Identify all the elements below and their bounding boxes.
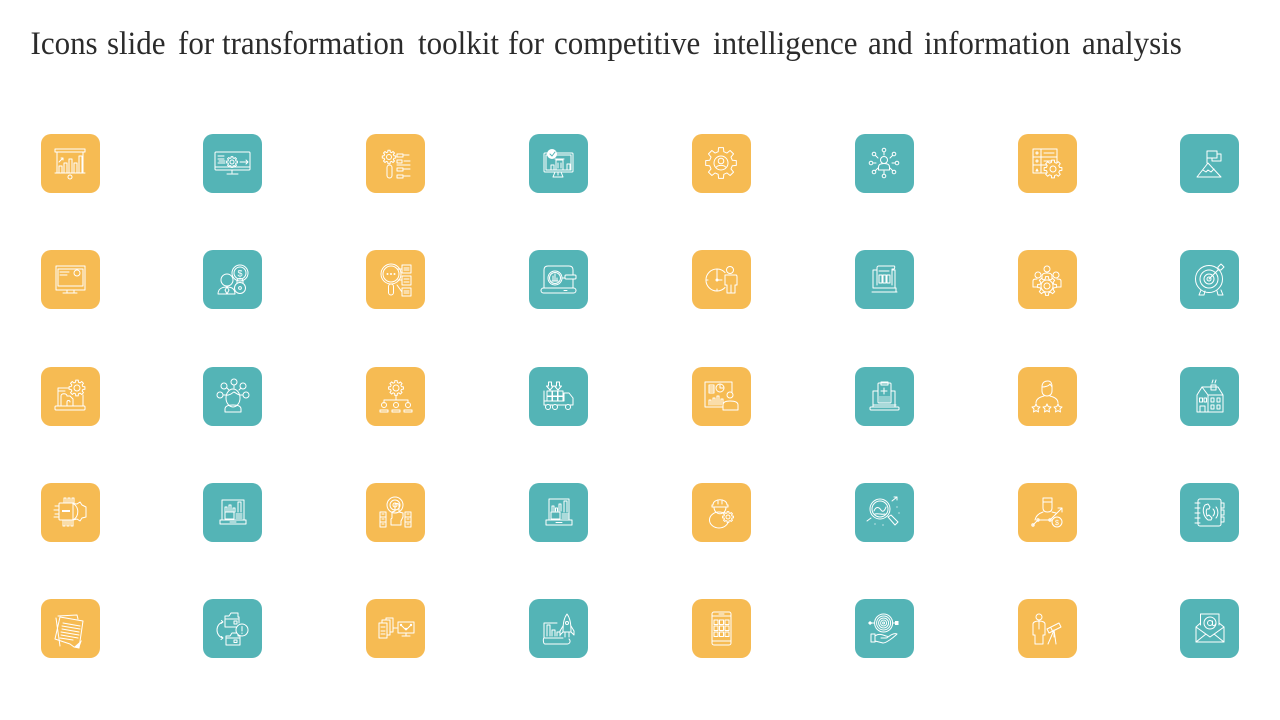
title: information	[924, 24, 1070, 61]
icon: magnifier trends	[867, 497, 900, 526]
icon: presenter dashboard	[705, 382, 738, 410]
tile: laptop statistics	[529, 483, 588, 542]
icon: table settings	[1033, 149, 1062, 178]
icon: documents	[55, 615, 83, 648]
tile: head with ideas	[203, 367, 262, 426]
tile: paper stack	[41, 599, 100, 658]
tile: laptop rocket	[529, 599, 588, 658]
tile: target in hand	[855, 599, 914, 658]
icon: files to monitor	[379, 618, 414, 638]
tile: mobile phone	[692, 599, 751, 658]
tile: folder exchange	[203, 599, 262, 658]
icon: person with three stars	[1032, 381, 1062, 412]
tile: house	[1180, 367, 1239, 426]
tile: email envelope	[1180, 599, 1239, 658]
icon: laptop dashboard	[220, 500, 246, 524]
icon: clipboard on laptop	[870, 382, 899, 410]
icon: worker with gear	[710, 500, 733, 528]
icon: person dollar lock: $	[237, 268, 243, 278]
icon: person with growth arrow: $	[1055, 520, 1059, 527]
title: Icons	[31, 24, 98, 61]
icon: presentation chart	[55, 149, 85, 179]
tile: team gear	[1018, 250, 1077, 309]
tile: time and person	[692, 250, 751, 309]
icon: laptop document	[872, 266, 897, 292]
title: intelligence	[713, 24, 857, 61]
tile: professional growth	[1018, 483, 1077, 542]
title: transformation	[222, 24, 404, 61]
tile: laptop chart	[203, 483, 262, 542]
title: slide	[107, 24, 165, 61]
icon: folders sync alert	[217, 613, 248, 645]
title: for	[508, 24, 544, 61]
tile: laptop with gears	[41, 367, 100, 426]
icon: hand touching circles	[380, 497, 411, 527]
title: toolkit	[418, 24, 499, 61]
tile: laptop report	[855, 250, 914, 309]
icon: phone notebook	[1195, 499, 1224, 526]
icon: mail with at sign	[1196, 614, 1224, 642]
icon: monitor gear	[215, 152, 250, 174]
icon: gear probe list	[382, 150, 410, 178]
tile: search analysis	[855, 483, 914, 542]
tile: monitor with gear	[203, 134, 262, 193]
tile: target	[1180, 250, 1239, 309]
icon: laptop with search	[541, 266, 576, 293]
icon: visionary telescope	[1033, 614, 1061, 644]
tile: mountain flag	[1180, 134, 1239, 193]
title: competitive	[554, 24, 700, 61]
tile: presentation board	[41, 134, 100, 193]
icon: tablet report	[546, 499, 572, 525]
tile: medical laptop	[855, 367, 914, 426]
title: for	[178, 24, 214, 61]
tile: person with telescope	[1018, 599, 1077, 658]
icon: building	[1197, 380, 1223, 412]
icon: processor with gear	[54, 498, 86, 526]
icon: clock and person	[706, 266, 737, 293]
tile: table with gear	[1018, 134, 1077, 193]
tile: gear with user	[692, 134, 751, 193]
icon: person with thought nodes	[217, 379, 249, 412]
icon: hand holding target	[868, 614, 898, 643]
icon: laptop gears	[55, 380, 85, 410]
icon: user with nodes	[869, 148, 899, 178]
icon: startup rocket laptop	[543, 614, 574, 644]
icon: target with arrow	[1196, 264, 1224, 295]
tile: rated employee	[1018, 367, 1077, 426]
icon: team around gear	[1033, 266, 1061, 295]
tile: org hierarchy gear	[366, 367, 425, 426]
tile: address book	[1180, 483, 1239, 542]
tile: engineer	[692, 483, 751, 542]
icon: monitor analytics check	[544, 149, 573, 177]
tile: monitor	[41, 250, 100, 309]
icon: desktop monitor	[56, 266, 85, 293]
tile: gear and list	[366, 134, 425, 193]
title: and	[868, 24, 913, 61]
title	[31, 24, 1182, 61]
tile: dashboard and person	[692, 367, 751, 426]
icon: smartphone apps	[712, 612, 731, 645]
title: analysis	[1082, 24, 1182, 61]
icon: flag on mountain	[1197, 151, 1221, 177]
tile: financial security person	[203, 250, 262, 309]
tile: chip gear	[41, 483, 100, 542]
icon: truck with boxes	[544, 382, 573, 410]
icon: gear user	[706, 148, 736, 178]
tile: documents and monitor	[366, 599, 425, 658]
tile: user network	[855, 134, 914, 193]
tile: magnifier and documents	[366, 250, 425, 309]
icon: search documents	[381, 264, 411, 296]
icon: gear over team	[380, 381, 412, 412]
tile: laptop analytics	[529, 250, 588, 309]
tile: touch panel	[366, 483, 425, 542]
tile: monitor with check	[529, 134, 588, 193]
tile: delivery truck	[529, 367, 588, 426]
